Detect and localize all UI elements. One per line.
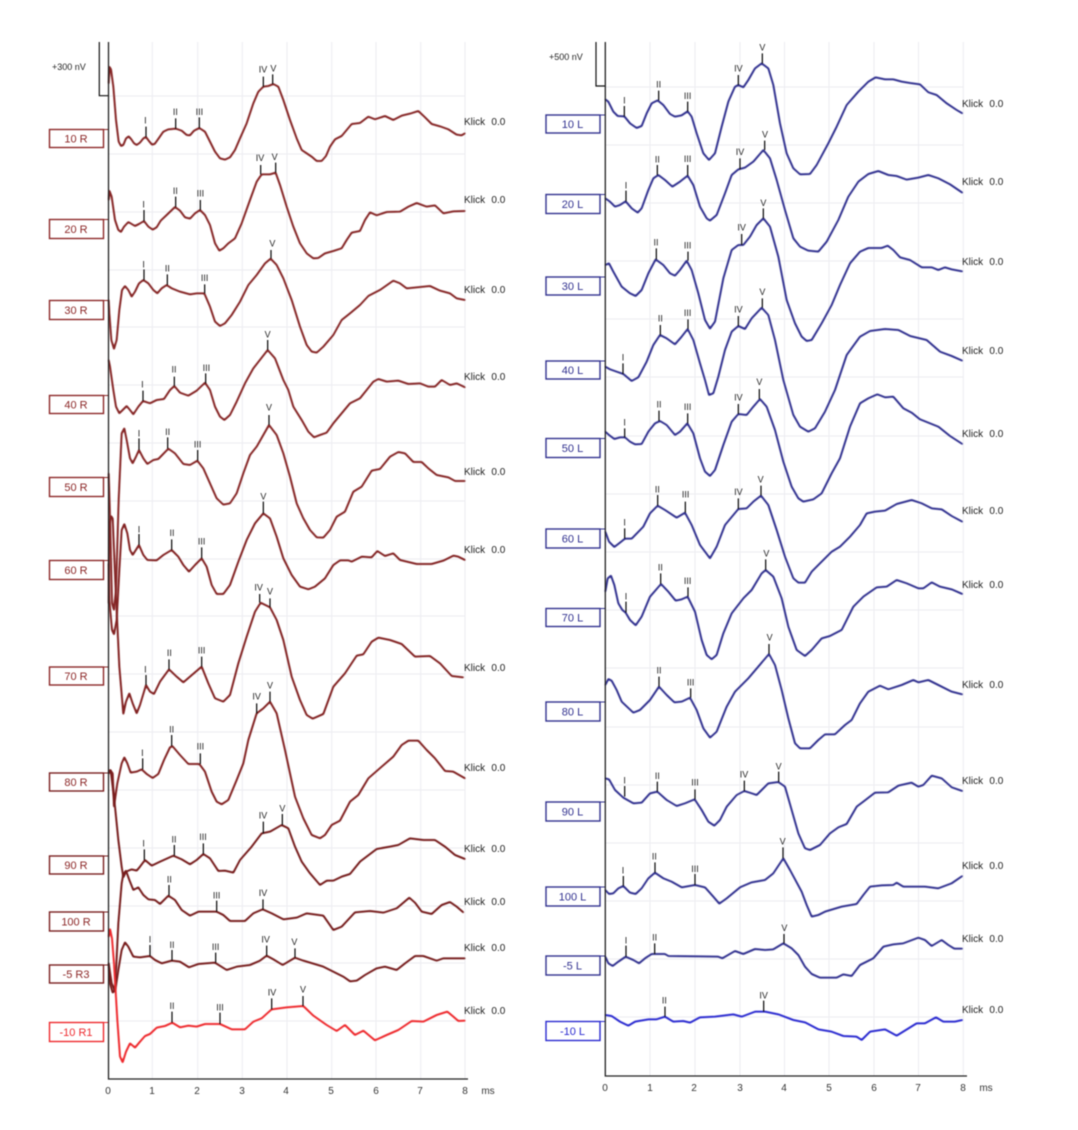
axes: left ear: 7 [915, 1083, 921, 1094]
peak markers: III [684, 154, 691, 164]
trace: 60 L [605, 475, 962, 583]
peak markers: I [141, 379, 144, 389]
peak markers: V [291, 937, 297, 947]
peak markers: III [682, 490, 689, 500]
label: -5 R3 [50, 965, 108, 983]
label: 60 L [546, 529, 605, 548]
peak markers [141, 680, 273, 769]
peak markers: IV [734, 487, 743, 497]
peak markers: I [625, 591, 627, 601]
stimulus labels: right ear: Klick 0.0 [464, 545, 506, 556]
waveform [605, 63, 962, 174]
label: 90 R: 90 R [64, 860, 88, 872]
waveform [109, 929, 465, 1062]
trace: 90 R [109, 770, 465, 885]
peak markers: IV [734, 63, 743, 73]
label: -10 L: -10 L [560, 1026, 585, 1038]
axes: right ear: 6 [373, 1086, 379, 1097]
peak markers: I [138, 429, 140, 439]
axes: right ear: 0 [105, 1086, 111, 1097]
peak markers: III [197, 189, 204, 199]
stimulus labels: right ear: Klick 0.0 [464, 943, 506, 954]
peak markers: III [194, 439, 201, 449]
axes: right ear: ms [481, 1086, 495, 1097]
peak markers: I [141, 748, 144, 758]
peak markers: IV [734, 393, 743, 403]
trace: -10 R1 [109, 929, 465, 1062]
peak markers: V [780, 836, 786, 846]
label: 20 L [546, 194, 605, 214]
stimulus labels: right ear: Klick 0.0 [464, 195, 506, 206]
label: -5 R3: -5 R3 [63, 969, 89, 981]
waveform [109, 942, 465, 993]
trace: 80 R [109, 680, 465, 838]
trace: 50 L [605, 377, 962, 502]
axes: left ear: 0 [602, 1083, 608, 1094]
peak markers [149, 934, 297, 963]
peak markers: I [142, 200, 145, 210]
trace: 70 L [605, 549, 962, 659]
trace: 40 R [109, 329, 465, 437]
label: 30 L: 30 L [562, 281, 583, 293]
label: 60 R [50, 560, 108, 580]
peak markers: V [260, 491, 266, 501]
label: 100 R: 100 R [61, 916, 91, 928]
trace: 10 L [605, 43, 962, 174]
scale bar: +500 nV: +500 nV [549, 52, 583, 62]
trace: 100 R [109, 871, 463, 992]
axes: left ear: 3 [737, 1083, 743, 1094]
peak markers: I [623, 418, 626, 428]
peak markers [144, 64, 276, 137]
peak markers [623, 43, 765, 116]
waveform [605, 394, 962, 502]
panel: left ear (blue) [546, 42, 1004, 1094]
peak markers [141, 329, 271, 401]
axes: left ear: ms [979, 1083, 993, 1094]
peak markers: II [169, 940, 174, 950]
waveform [605, 496, 962, 583]
peak markers: V [762, 129, 768, 139]
trace: -5 R3 [109, 934, 465, 993]
peak markers: IV [252, 691, 261, 701]
stimulus labels: right ear: Klick 0.0 [464, 467, 506, 478]
peak markers: II [656, 80, 661, 90]
waveform [605, 938, 962, 978]
label: 80 L [546, 702, 605, 721]
label: 20 L: 20 L [562, 199, 583, 211]
peak markers: II [169, 1001, 174, 1011]
waveform [109, 67, 465, 161]
stimulus labels: right ear: Klick 0.0 [464, 844, 506, 855]
label: 30 R: 30 R [64, 305, 88, 317]
peak markers: I [144, 115, 147, 125]
label: 70 R [50, 667, 108, 685]
peak markers: V [776, 761, 782, 771]
peak markers: II [662, 996, 667, 1006]
peak markers: II [169, 528, 174, 538]
peak markers: IV [261, 934, 270, 944]
axes: left ear: 5 [826, 1083, 832, 1094]
label: 100 L [546, 887, 605, 906]
peak markers [622, 836, 786, 886]
peak markers: V [758, 475, 764, 485]
peak markers [623, 475, 764, 539]
label: -5 L: -5 L [563, 960, 582, 972]
axes: left ear: 6 [871, 1083, 877, 1094]
label: 10 R: 10 R [64, 134, 88, 146]
waveform [109, 350, 465, 437]
scale bar: +300 nV: +300 nV [52, 62, 86, 72]
peak markers: V [763, 549, 769, 559]
label: 50 L [546, 438, 605, 458]
peak markers: V [767, 633, 773, 643]
peak markers: IV [254, 583, 263, 593]
label: 80 L: 80 L [562, 706, 583, 718]
label: 40 L [546, 361, 605, 379]
peak markers: II [165, 264, 170, 274]
peak markers: III [201, 273, 208, 283]
stimulus labels: left ear [962, 99, 1004, 1016]
waveform [605, 308, 962, 432]
peak markers: V [267, 587, 273, 597]
label: 50 L: 50 L [562, 443, 583, 455]
peak markers: IV [256, 153, 264, 163]
label: 70 L [546, 608, 605, 626]
peak markers: IV [737, 223, 746, 233]
peak markers: II [655, 771, 660, 781]
peak markers: II [652, 933, 657, 943]
peak markers: III [684, 308, 691, 318]
peak markers [625, 549, 769, 613]
peak markers: II [655, 484, 660, 494]
peak markers: IV [268, 987, 276, 997]
stimulus labels: right ear: Klick 0.0 [464, 663, 506, 674]
peak markers [142, 152, 278, 221]
peak markers: I [144, 664, 147, 674]
peak markers: IV [736, 147, 744, 157]
peak markers [138, 491, 266, 558]
peak markers: III [203, 363, 210, 373]
axes: left ear: 2 [691, 1083, 697, 1094]
stimulus labels: right ear: Klick 0.0 [464, 1006, 506, 1017]
peak markers: III [196, 107, 203, 117]
peak markers: III [687, 678, 694, 688]
waveform [109, 702, 465, 838]
trace: 60 R [109, 491, 465, 634]
peak markers: I [149, 935, 151, 945]
peak markers: IV [259, 888, 267, 898]
axes: left ear: 1 [647, 1083, 653, 1094]
peak markers: V [759, 287, 765, 297]
trace: 30 R [109, 239, 465, 353]
trace: 10 R [109, 64, 465, 161]
peak markers: I [623, 518, 626, 528]
peak markers: I [625, 935, 627, 945]
peak markers: V [270, 64, 276, 74]
stimulus labels: left ear: Klick 0.0 [962, 1005, 1004, 1016]
peak markers [623, 377, 762, 437]
axes: right ear: 5 [328, 1086, 334, 1097]
labels: right ear intensities [50, 130, 108, 1042]
peak markers: I [622, 865, 624, 875]
waveform [605, 570, 962, 659]
peak markers: V [756, 377, 762, 387]
label: -5 L [546, 956, 605, 975]
axes: right ear [105, 42, 495, 1097]
peak markers [662, 990, 768, 1017]
peak markers [656, 633, 773, 698]
peak markers: II [171, 835, 176, 845]
peak markers: II [169, 724, 174, 734]
label: -10 R1 [50, 1022, 108, 1042]
axes: left ear [602, 42, 993, 1094]
labels: left ear intensities [546, 115, 605, 1040]
stimulus labels: right ear: Klick 0.0 [464, 763, 506, 774]
waveform [605, 858, 962, 917]
peak markers: IV [740, 769, 748, 779]
label: 30 R [50, 300, 108, 320]
peak markers: I [142, 839, 145, 849]
label: 10 L [546, 115, 605, 133]
stimulus labels: left ear: Klick 0.0 [962, 776, 1004, 787]
trace: 40 L [605, 287, 962, 432]
axes: right ear: 2 [194, 1086, 200, 1097]
axes: left ear: 8 [960, 1083, 966, 1094]
waveform [109, 259, 465, 353]
peak markers: II [171, 364, 176, 374]
peak markers: I [623, 95, 626, 105]
peak markers: III [198, 537, 205, 547]
trace: 100 L [605, 836, 962, 917]
waveform [109, 770, 465, 885]
peak markers [142, 239, 275, 293]
peak markers: II [658, 563, 663, 573]
label: 50 R: 50 R [64, 482, 88, 494]
label: 80 R: 80 R [64, 777, 88, 789]
label: 20 R [50, 220, 108, 238]
stimulus labels: left ear: Klick 0.0 [962, 680, 1004, 691]
stimulus labels: right ear: Klick 0.0 [464, 372, 506, 383]
axes: right ear: 8 [462, 1086, 468, 1097]
stimulus labels: left ear: Klick 0.0 [962, 429, 1004, 440]
stimulus labels: left ear: Klick 0.0 [962, 506, 1004, 517]
trace: 20 L [605, 129, 962, 252]
peak markers: II [652, 851, 657, 861]
peak markers: II [167, 874, 172, 884]
trace: 30 L [605, 198, 962, 341]
label: 90 L: 90 L [562, 806, 583, 818]
trace: 90 L [605, 761, 962, 850]
peak markers [625, 923, 787, 957]
axes: right ear: 7 [417, 1086, 423, 1097]
peak markers: V [760, 198, 766, 208]
label: 90 R [50, 856, 108, 874]
peak markers: III [684, 576, 691, 586]
stimulus labels: right ear: Klick 0.0 [464, 285, 506, 296]
peak markers: V [759, 43, 765, 53]
peak markers [142, 804, 285, 860]
peak markers: III [198, 645, 205, 655]
peak markers: III [691, 778, 699, 788]
trace: 70 R [109, 516, 463, 719]
peak markers: IV [734, 305, 743, 315]
peak markers: IV [259, 810, 267, 820]
label: 100 L: 100 L [559, 892, 586, 904]
label: -10 L [546, 1022, 605, 1040]
waveform [605, 150, 962, 252]
axes: right ear: 1 [149, 1086, 155, 1097]
peak markers: II [656, 665, 661, 675]
trace: 20 R [109, 152, 465, 258]
stimulus labels: left ear: Klick 0.0 [962, 580, 1004, 591]
peak markers [138, 403, 272, 461]
label: 70 L: 70 L [562, 612, 583, 624]
peak markers: IV [259, 64, 267, 74]
waveform [605, 1012, 962, 1040]
peak markers [144, 583, 273, 685]
peak markers: II [173, 107, 178, 117]
waveform [109, 513, 465, 634]
peak markers: III [684, 91, 691, 101]
stimulus labels: left ear: Klick 0.0 [962, 934, 1004, 945]
peak markers: II [165, 427, 170, 437]
label: 60 L: 60 L [562, 534, 583, 546]
peak markers: V [266, 403, 272, 413]
label: 10 R [50, 130, 108, 148]
label: 40 R: 40 R [64, 400, 88, 412]
waveform [109, 871, 463, 992]
peak markers [653, 198, 766, 261]
peak markers [625, 129, 768, 201]
peak markers: I [138, 524, 140, 534]
peak markers: V [272, 152, 278, 162]
peak markers: III [212, 942, 219, 952]
axes: right ear: 4 [283, 1086, 289, 1097]
label: 20 R: 20 R [64, 224, 88, 236]
peak markers [622, 287, 765, 374]
peak markers: V [265, 329, 271, 339]
waveform [605, 218, 962, 341]
stimulus labels: left ear: Klick 0.0 [962, 346, 1004, 357]
peak markers: I [142, 260, 145, 270]
stimulus labels: right ear: Klick 0.0 [464, 117, 506, 128]
peak markers [623, 761, 782, 799]
trace: 80 L [605, 633, 962, 748]
peak markers: IV [759, 990, 768, 1000]
peak markers: I [623, 775, 626, 785]
peak markers: I [625, 180, 627, 190]
label: 100 R [50, 912, 108, 931]
scale bar: +300 nV [52, 42, 108, 96]
stimulus labels: right ear: Klick 0.0 [464, 897, 506, 908]
panel: right ear (red) [50, 42, 506, 1097]
peak markers: III [216, 1002, 224, 1012]
trace: -10 L [605, 990, 962, 1040]
peak markers: III [684, 241, 691, 251]
waveform [109, 516, 463, 719]
waveform [109, 173, 465, 258]
peak markers: V [300, 985, 306, 995]
label: 70 R: 70 R [64, 671, 88, 683]
peak markers: III [691, 864, 699, 874]
waveform [605, 654, 962, 748]
stimulus labels: left ear: Klick 0.0 [962, 177, 1004, 188]
scale bar: +500 nV [549, 42, 605, 86]
peak markers: II [167, 648, 172, 658]
peak markers [167, 874, 267, 912]
waveform [605, 776, 962, 850]
peak markers: V [781, 923, 787, 933]
label: 90 L [546, 802, 605, 821]
axes: left ear: 4 [781, 1083, 787, 1094]
peak markers: V [267, 680, 273, 690]
stimulus labels: right ear [464, 117, 506, 1017]
trace: -5 L [605, 923, 962, 978]
peak markers: II [658, 314, 663, 324]
peak markers: II [655, 154, 660, 164]
label: 50 R [50, 478, 108, 496]
stimulus labels: left ear: Klick 0.0 [962, 99, 1004, 110]
stimulus labels: left ear: Klick 0.0 [962, 257, 1004, 268]
stimulus labels: left ear: Klick 0.0 [962, 861, 1004, 872]
waveform [109, 425, 465, 610]
peak markers: II [656, 400, 661, 410]
peak markers: III [197, 741, 204, 751]
peak markers [169, 985, 306, 1024]
label: -10 R1: -10 R1 [59, 1027, 93, 1039]
label: 80 R [50, 773, 108, 791]
label: 40 R [50, 396, 108, 414]
peak markers: III [199, 832, 207, 842]
peak markers: V [279, 804, 285, 814]
peak markers: II [173, 186, 178, 196]
axes: right ear: 3 [239, 1086, 245, 1097]
peak markers: V [269, 239, 275, 249]
label: 30 L [546, 277, 605, 295]
trace: 50 R [109, 403, 465, 610]
label: 10 L: 10 L [562, 119, 583, 131]
peak markers: I [622, 353, 624, 363]
peak markers: II [653, 238, 658, 248]
peak markers: III [684, 402, 691, 412]
label: 60 R: 60 R [64, 565, 88, 577]
peak markers: III [213, 891, 220, 901]
label: 40 L: 40 L [562, 365, 583, 377]
